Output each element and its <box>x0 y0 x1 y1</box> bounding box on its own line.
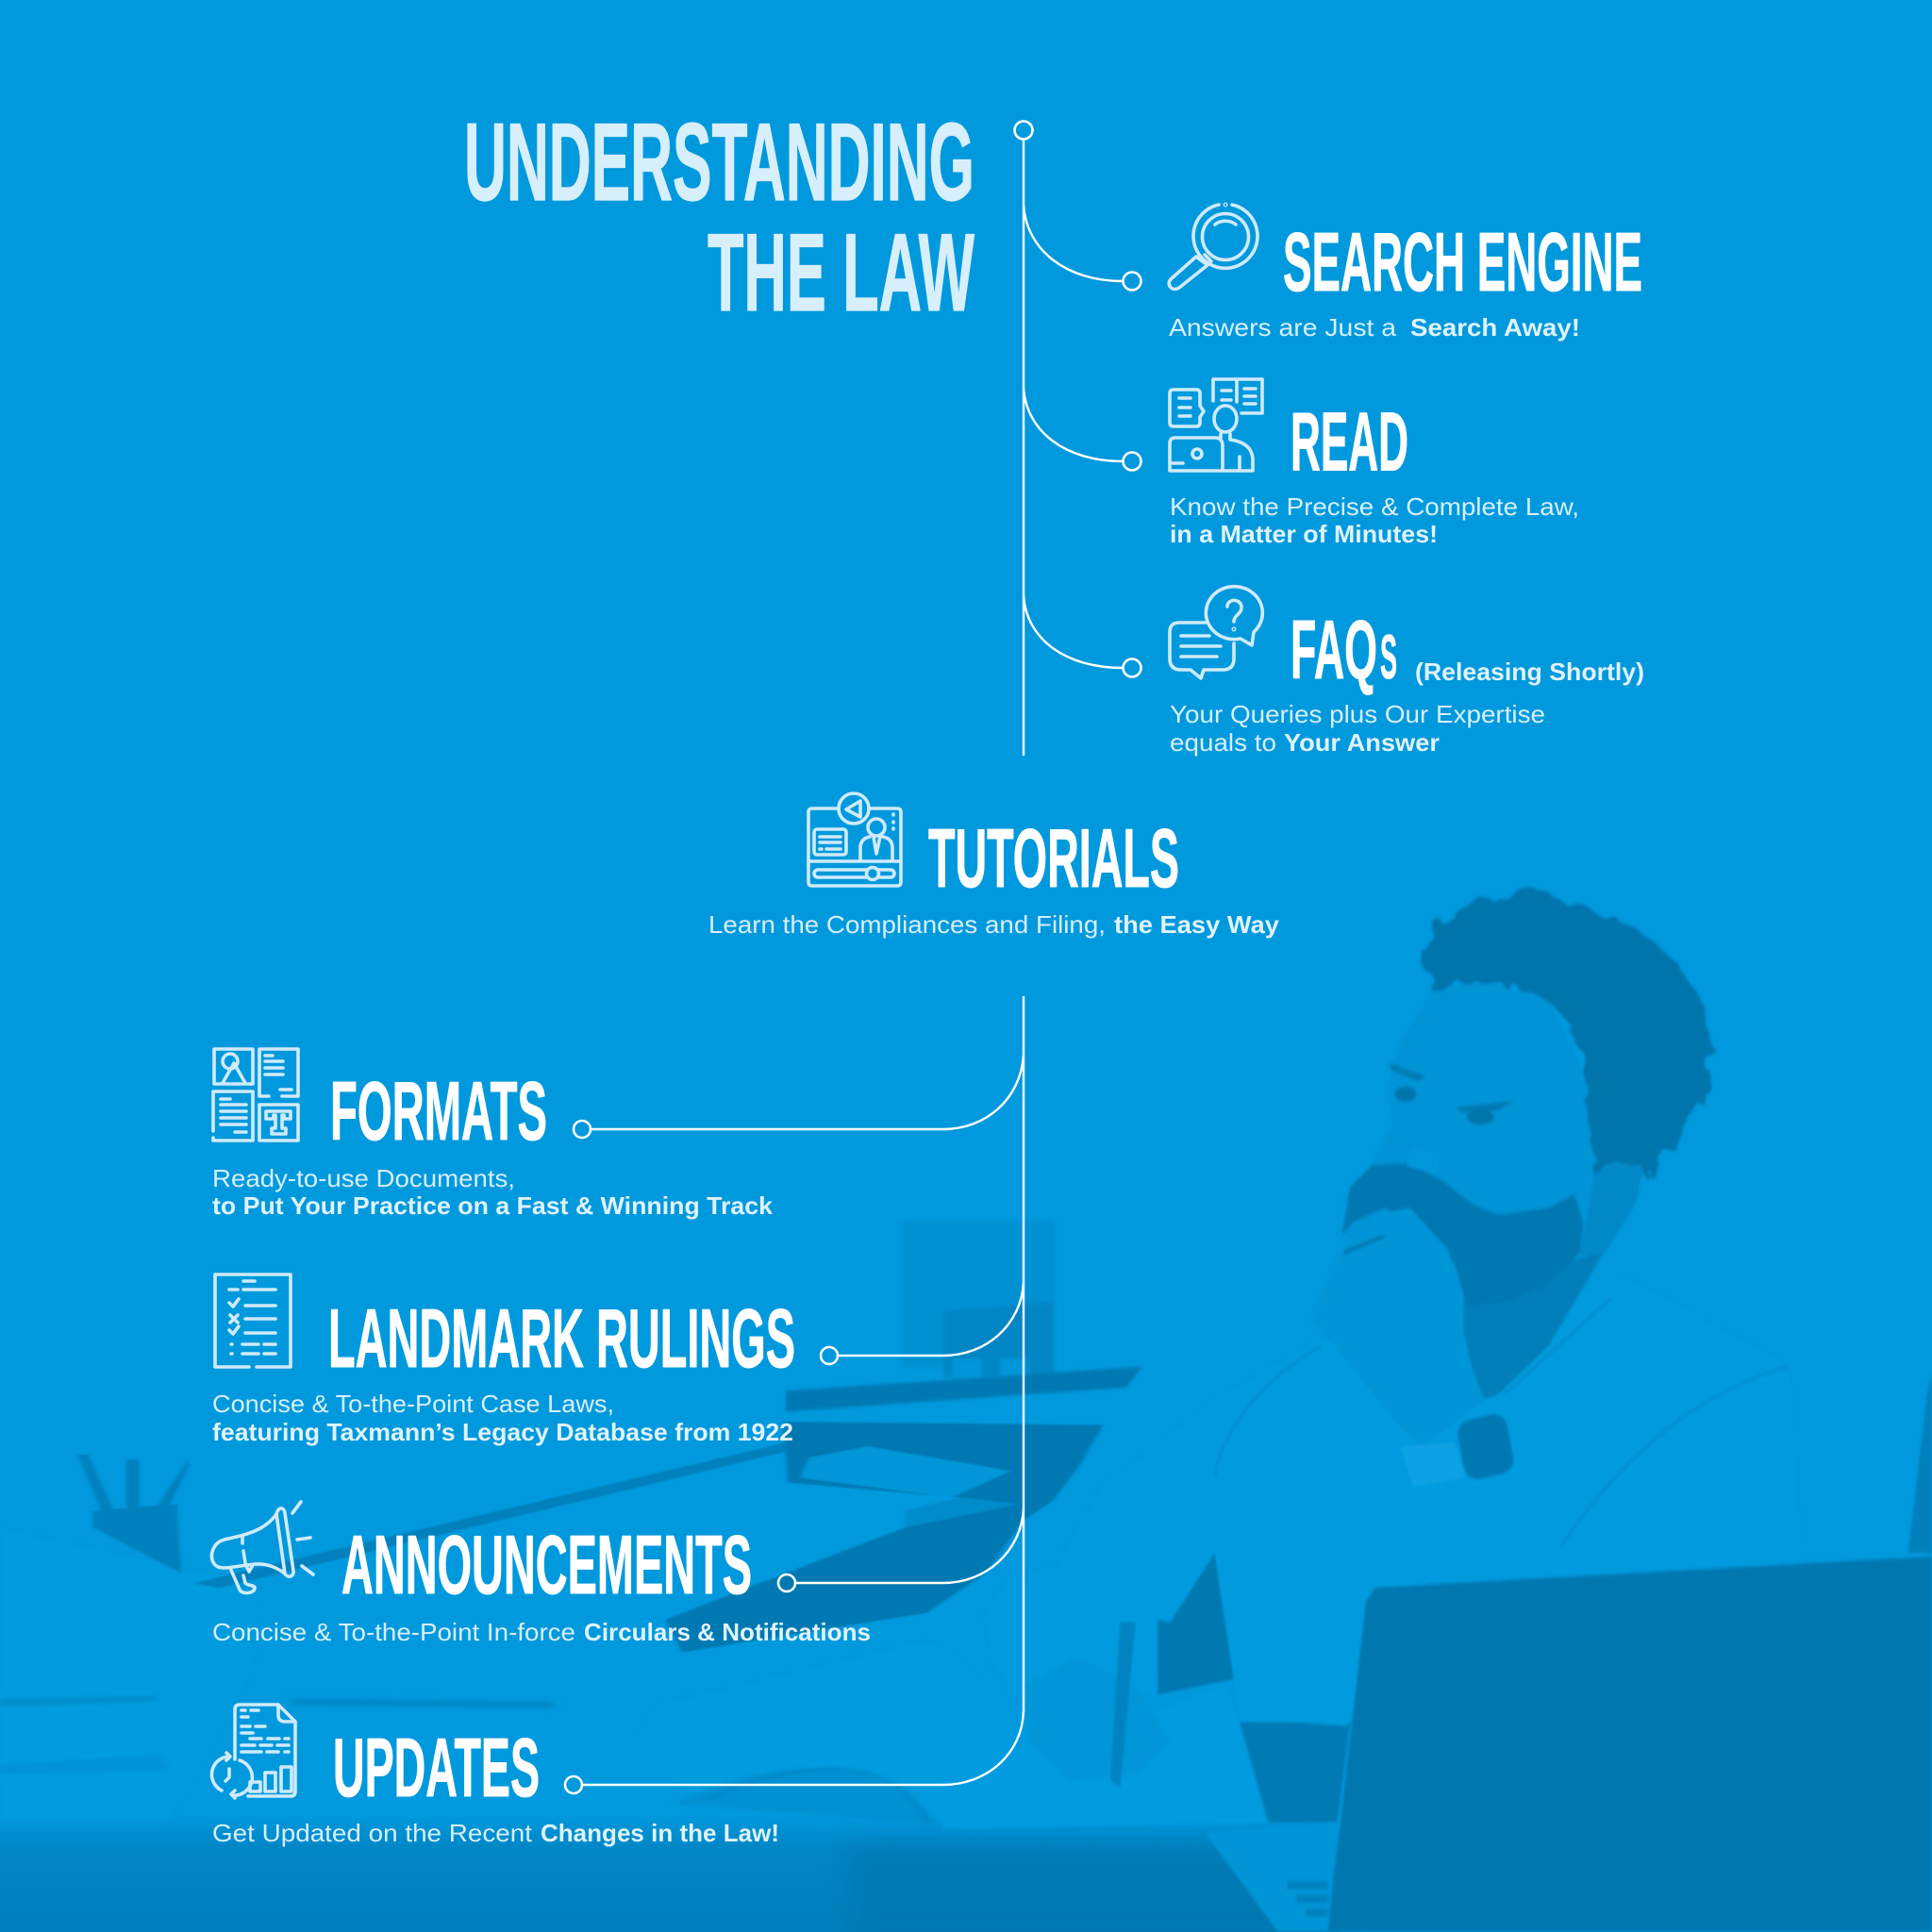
face <box>1347 980 1643 1319</box>
description: Answers are Just a <box>1169 313 1397 341</box>
description: featuring Taxmann’s Legacy Database from 1922 <box>212 1418 793 1446</box>
eyes and brows <box>1390 1063 1514 1113</box>
hand on chin <box>1312 1208 1484 1446</box>
section: landmark rulings <box>212 1274 795 1446</box>
description: Circulars & Notifications <box>584 1618 871 1646</box>
shirt outlines <box>1214 1298 1789 1546</box>
section: announcements <box>211 1502 871 1646</box>
main title <box>464 100 974 334</box>
description: the Easy Way <box>1114 910 1280 939</box>
description: Your Queries plus Our Expertise <box>1170 700 1545 728</box>
description: Concise & To-the-Point Case Laws, <box>212 1390 614 1418</box>
heading: UPDATES <box>333 1721 540 1814</box>
figure coordinates <box>786 887 1932 1931</box>
description: Concise & To-the-Point In-force <box>212 1618 575 1646</box>
description: Ready-to-use Documents, <box>212 1164 515 1192</box>
neck <box>1463 1249 1606 1401</box>
note: releasing shortly: (Releasing Shortly) <box>1415 658 1644 686</box>
section: FAQs: S <box>1380 622 1397 691</box>
heading <box>1291 603 1397 696</box>
ear <box>1580 1163 1643 1257</box>
icon: person reading <box>1170 379 1262 471</box>
main title: UNDERSTANDING <box>464 100 974 224</box>
desk shade right <box>849 1844 1340 1932</box>
heading: TUTORIALS <box>928 811 1179 905</box>
connector: upper timeline <box>1015 121 1141 756</box>
desk shade <box>0 1816 1321 1932</box>
description: equals to <box>1170 728 1276 757</box>
icon: checklist <box>215 1274 291 1367</box>
description: Get Updated on the Recent <box>212 1819 533 1847</box>
connector: lower timeline <box>565 996 1024 1793</box>
icon: video tutorial <box>808 793 901 886</box>
laptop lid <box>1328 1557 1932 1931</box>
description: Search Away! <box>1410 313 1580 341</box>
section: read <box>1170 379 1579 548</box>
section: tutorials <box>708 793 1280 939</box>
watch <box>1401 1442 1467 1488</box>
heading: FORMATS <box>330 1064 547 1158</box>
section: updates <box>211 1705 779 1847</box>
description: Know the Precise & Complete Law, <box>1170 492 1579 521</box>
description: to Put Your Practice on a Fast & Winning Track <box>212 1191 774 1220</box>
beard <box>1341 1163 1583 1305</box>
icon: speech bubbles <box>1170 587 1262 678</box>
notepad <box>943 1684 1268 1829</box>
description: Learn the Compliances and Filing, <box>708 910 1106 939</box>
description: Your Answer <box>1284 728 1440 757</box>
section: search engine <box>1169 204 1642 341</box>
heading: LANDMARK RULINGS <box>328 1291 795 1385</box>
section: formats <box>212 1049 774 1220</box>
description: Changes in the Law! <box>541 1819 779 1847</box>
description: in a Matter of Minutes! <box>1170 520 1438 548</box>
main title: THE LAW <box>708 210 974 334</box>
shirt <box>988 1277 1801 1725</box>
shelf and binders <box>901 1222 1055 1368</box>
writing hand <box>1025 1657 1171 1781</box>
background photo: man thinking at desk, blue duotone <box>0 887 1932 1932</box>
icon: megaphone <box>211 1502 313 1593</box>
heading: READ <box>1291 394 1408 489</box>
heading: ANNOUNCEMENTS <box>341 1518 752 1611</box>
section: FAQs <box>1170 587 1644 757</box>
hair <box>1423 887 1714 1180</box>
forearm <box>984 1567 1158 1705</box>
icon: document formats <box>213 1049 298 1141</box>
heading: FAQ <box>1291 603 1377 696</box>
laptop keyboard deck <box>1205 1823 1338 1931</box>
icon: magnifying glass <box>1169 204 1257 289</box>
icon: document with refresh and bars <box>211 1705 295 1798</box>
